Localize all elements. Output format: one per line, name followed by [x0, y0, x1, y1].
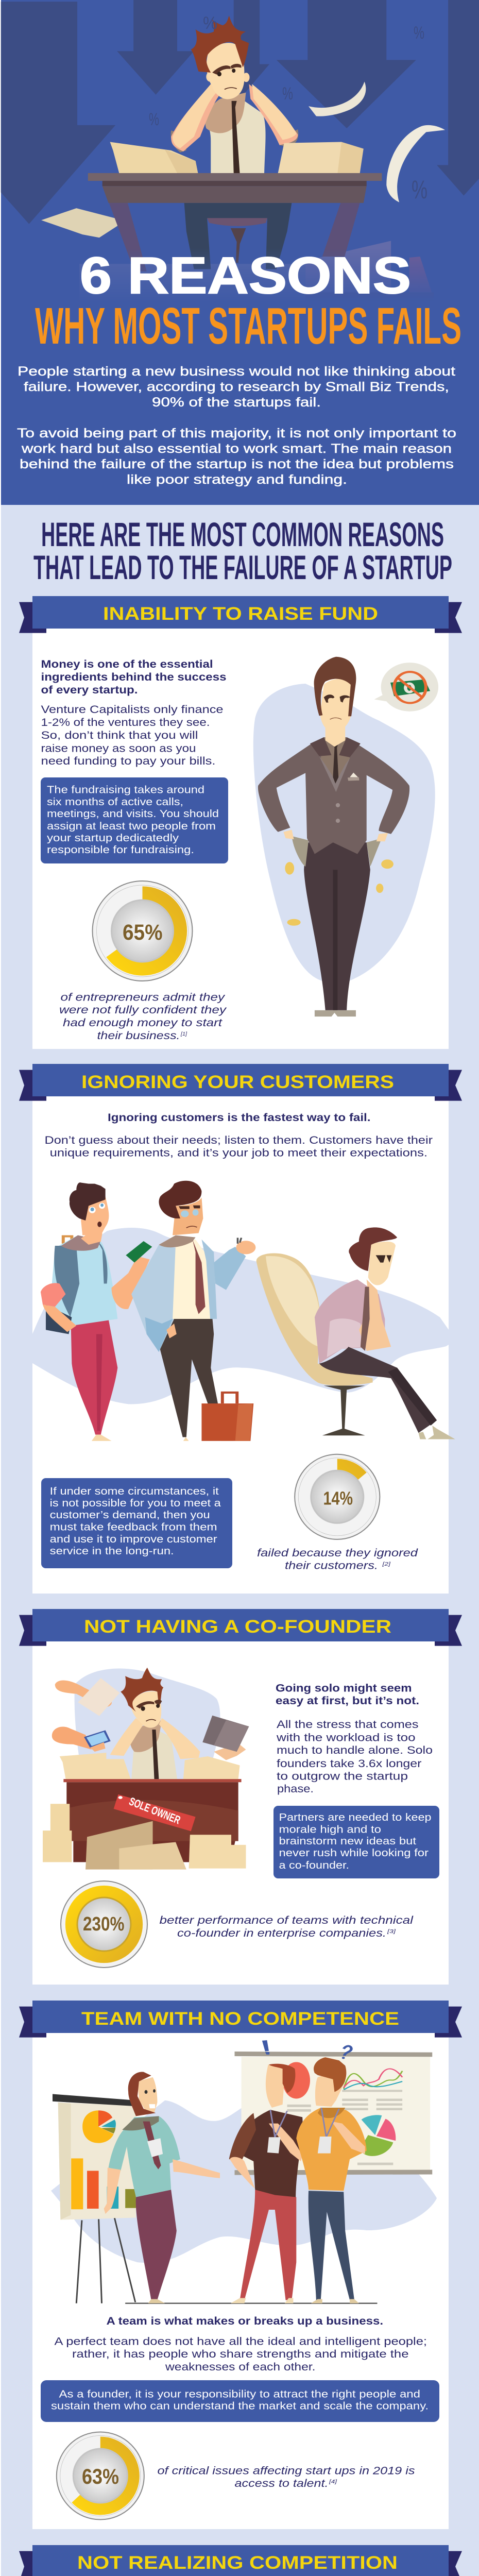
- intro text: work hard but also essential to work smart. The main reason: [21, 442, 452, 456]
- callout: assign at least two people from: [47, 821, 216, 832]
- intro text: People starting a new business would not like thinking about: [18, 364, 455, 379]
- body text: So, don’t think that you will: [41, 730, 198, 741]
- callout: six months of active calls,: [47, 796, 183, 808]
- lead text: Going solo might seem: [276, 1683, 412, 1694]
- stat caption: [257, 1547, 419, 1572]
- panel: inability to raise fund: [19, 596, 462, 1049]
- body text: need funding to pay your bills.: [41, 755, 215, 767]
- donut: 63%: 63%: [82, 2464, 119, 2488]
- percent signs: %: [203, 13, 217, 33]
- stat caption: access to talent.: [235, 2478, 329, 2489]
- hero panel: [1, 0, 479, 505]
- ribbon heading: TEAM WITH NO COMPETENCE: [81, 2009, 399, 2029]
- donut: 65%: [93, 881, 193, 981]
- stat caption: [59, 991, 227, 1042]
- body text: much to handle alone. Solo: [277, 1744, 433, 1756]
- stat caption: [4]: [329, 2479, 337, 2485]
- body text: founders take 3.6x longer: [277, 1758, 421, 1770]
- body text: [276, 1719, 433, 1795]
- ribbon heading: INABILITY TO RAISE FUND: [103, 604, 378, 624]
- lead text: ingredients behind the success: [41, 671, 227, 683]
- lead text: Money is one of the essential: [41, 658, 213, 670]
- illustration: overwhelmed sole owner: [43, 1668, 249, 1870]
- callout: Partners are needed to keep: [279, 1812, 432, 1823]
- body text: [41, 704, 224, 767]
- percent signs: %: [414, 23, 424, 43]
- intro text: 90% of the startups fail.: [152, 395, 321, 410]
- callout: [273, 1806, 439, 1878]
- panel: not having a co-founder: [19, 1609, 462, 1985]
- stat caption: [1]: [180, 1031, 187, 1037]
- stat caption: their business.: [97, 1030, 180, 1042]
- body text: with the workload is too: [276, 1732, 415, 1743]
- callout: As a founder, it is your responsibility to attract the right people and: [59, 2388, 420, 2400]
- donut: 14%: [295, 1454, 380, 1539]
- illustration: man with empty pockets: [253, 657, 438, 1016]
- ribbon heading: [19, 2001, 462, 2038]
- callout: your startup dedicatedly: [47, 833, 179, 844]
- callout: brainstorm new ideas but: [279, 1836, 417, 1847]
- lead text: [276, 1683, 419, 1707]
- body text: [44, 1134, 433, 1159]
- callout: and use it to improve customer: [50, 1534, 217, 1545]
- ribbon heading: NOT REALIZING COMPETITION: [77, 2553, 398, 2573]
- intro text: To avoid being part of this majority, it is not only important to: [17, 426, 456, 440]
- body text: All the stress that comes: [277, 1719, 418, 1731]
- callout: If under some circumstances, it: [50, 1486, 219, 1497]
- body text: unique requirements, and it’s your job to meet their expectations.: [50, 1147, 427, 1159]
- ribbon heading: [19, 596, 462, 633]
- stat caption: of entrepreneurs admit they: [61, 991, 226, 1004]
- panel: not realizing competition: [19, 2545, 462, 2576]
- intro text: failure. However, according to research by Small Biz Trends,: [24, 380, 449, 394]
- intro text: like poor strategy and funding.: [127, 472, 347, 487]
- lead text: [41, 658, 227, 696]
- callout: sustain them who can understand the market and scale the company.: [51, 2401, 429, 2412]
- panel: team with no competence: [19, 2001, 462, 2529]
- callout: [41, 1478, 232, 1568]
- illustration: arguing team: [51, 2040, 437, 2303]
- stat caption: had enough money to start: [63, 1017, 223, 1029]
- stat caption: were not fully confident they: [59, 1004, 227, 1016]
- callout: morale high and to: [279, 1824, 381, 1835]
- stat caption: failed because they ignored: [257, 1547, 419, 1559]
- body text: Venture Capitalists only finance: [41, 704, 224, 716]
- callout: [41, 777, 228, 863]
- stat caption: co-founder in enterprise companies.: [177, 1927, 386, 1939]
- donut: 65%: 65%: [123, 920, 163, 945]
- sign text: SOLE OWNER: [127, 1794, 182, 1826]
- ribbon heading: [19, 2545, 462, 2576]
- body text: rather, it has people who share strengths and mitigate the: [72, 2348, 409, 2360]
- illustration: three men ignoring customer: [32, 1181, 455, 1441]
- callout: responsible for fundraising.: [47, 844, 194, 856]
- lead text: of every startup.: [41, 684, 138, 696]
- lead text: easy at first, but it’s not.: [276, 1695, 419, 1707]
- callout: The fundraising takes around: [47, 784, 204, 795]
- donut: 230%: 230%: [83, 1913, 125, 1935]
- callout: [41, 2380, 439, 2422]
- body text: to outgrow the startup: [277, 1771, 408, 1783]
- ribbon heading: [19, 1609, 462, 1646]
- body text: A perfect team does not have all the ideal and intelligent people;: [55, 2336, 427, 2347]
- percent signs: [149, 13, 427, 204]
- callout: is not possible for you to meet a: [50, 1498, 221, 1509]
- ribbon heading: NOT HAVING A CO-FOUNDER: [84, 1617, 391, 1637]
- stat caption: [160, 1914, 414, 1939]
- body text: 1-2% of the ventures they see.: [41, 717, 210, 728]
- callout: customer’s demand, then you: [50, 1510, 210, 1521]
- lead text: A team is what makes or breaks up a business.: [106, 2315, 383, 2327]
- body text: weaknesses of each other.: [165, 2361, 315, 2373]
- percent signs: %: [282, 84, 293, 104]
- body text: phase.: [277, 1783, 314, 1795]
- stat caption: [158, 2465, 415, 2489]
- panel: ignoring your customers: [19, 1064, 462, 1594]
- percent signs: %: [412, 175, 427, 204]
- donut: 230%: [61, 1881, 147, 1968]
- lead text: Ignoring customers is the fastest way to fail.: [108, 1112, 371, 1124]
- intro text: behind the failure of the startup is not the idea but problems: [20, 457, 454, 471]
- percent signs: %: [149, 110, 159, 129]
- title: 6 REASONS: [80, 247, 411, 304]
- stat caption: of critical issues affecting start ups in 2019 is: [158, 2465, 415, 2477]
- callout: meetings, and visits. You should: [47, 808, 219, 820]
- donut: 63%: [57, 2432, 144, 2519]
- intro text: [17, 364, 456, 487]
- callout: a co-founder.: [279, 1860, 349, 1871]
- ribbon heading: IGNORING YOUR CUSTOMERS: [81, 1072, 394, 1092]
- section heading: [33, 515, 452, 586]
- stat caption: better performance of teams with technical: [160, 1914, 414, 1926]
- callout: must take feedback from them: [50, 1522, 217, 1533]
- body text: [55, 2336, 427, 2373]
- donut: 14%: 14%: [323, 1488, 353, 1509]
- body text: raise money as soon as you: [41, 743, 196, 754]
- callout: service in the long-run.: [50, 1546, 174, 1557]
- stat caption: their customers.: [285, 1560, 378, 1572]
- ribbon heading: [19, 1064, 462, 1101]
- callout: never rush while looking for: [279, 1848, 429, 1859]
- body text: Don’t guess about their needs; listen to them. Customers have their: [44, 1134, 433, 1146]
- stat caption: [3]: [387, 1929, 396, 1935]
- illustration: stressed man at desk: [1, 0, 479, 303]
- title: [35, 247, 461, 355]
- stat caption: [2]: [382, 1562, 390, 1567]
